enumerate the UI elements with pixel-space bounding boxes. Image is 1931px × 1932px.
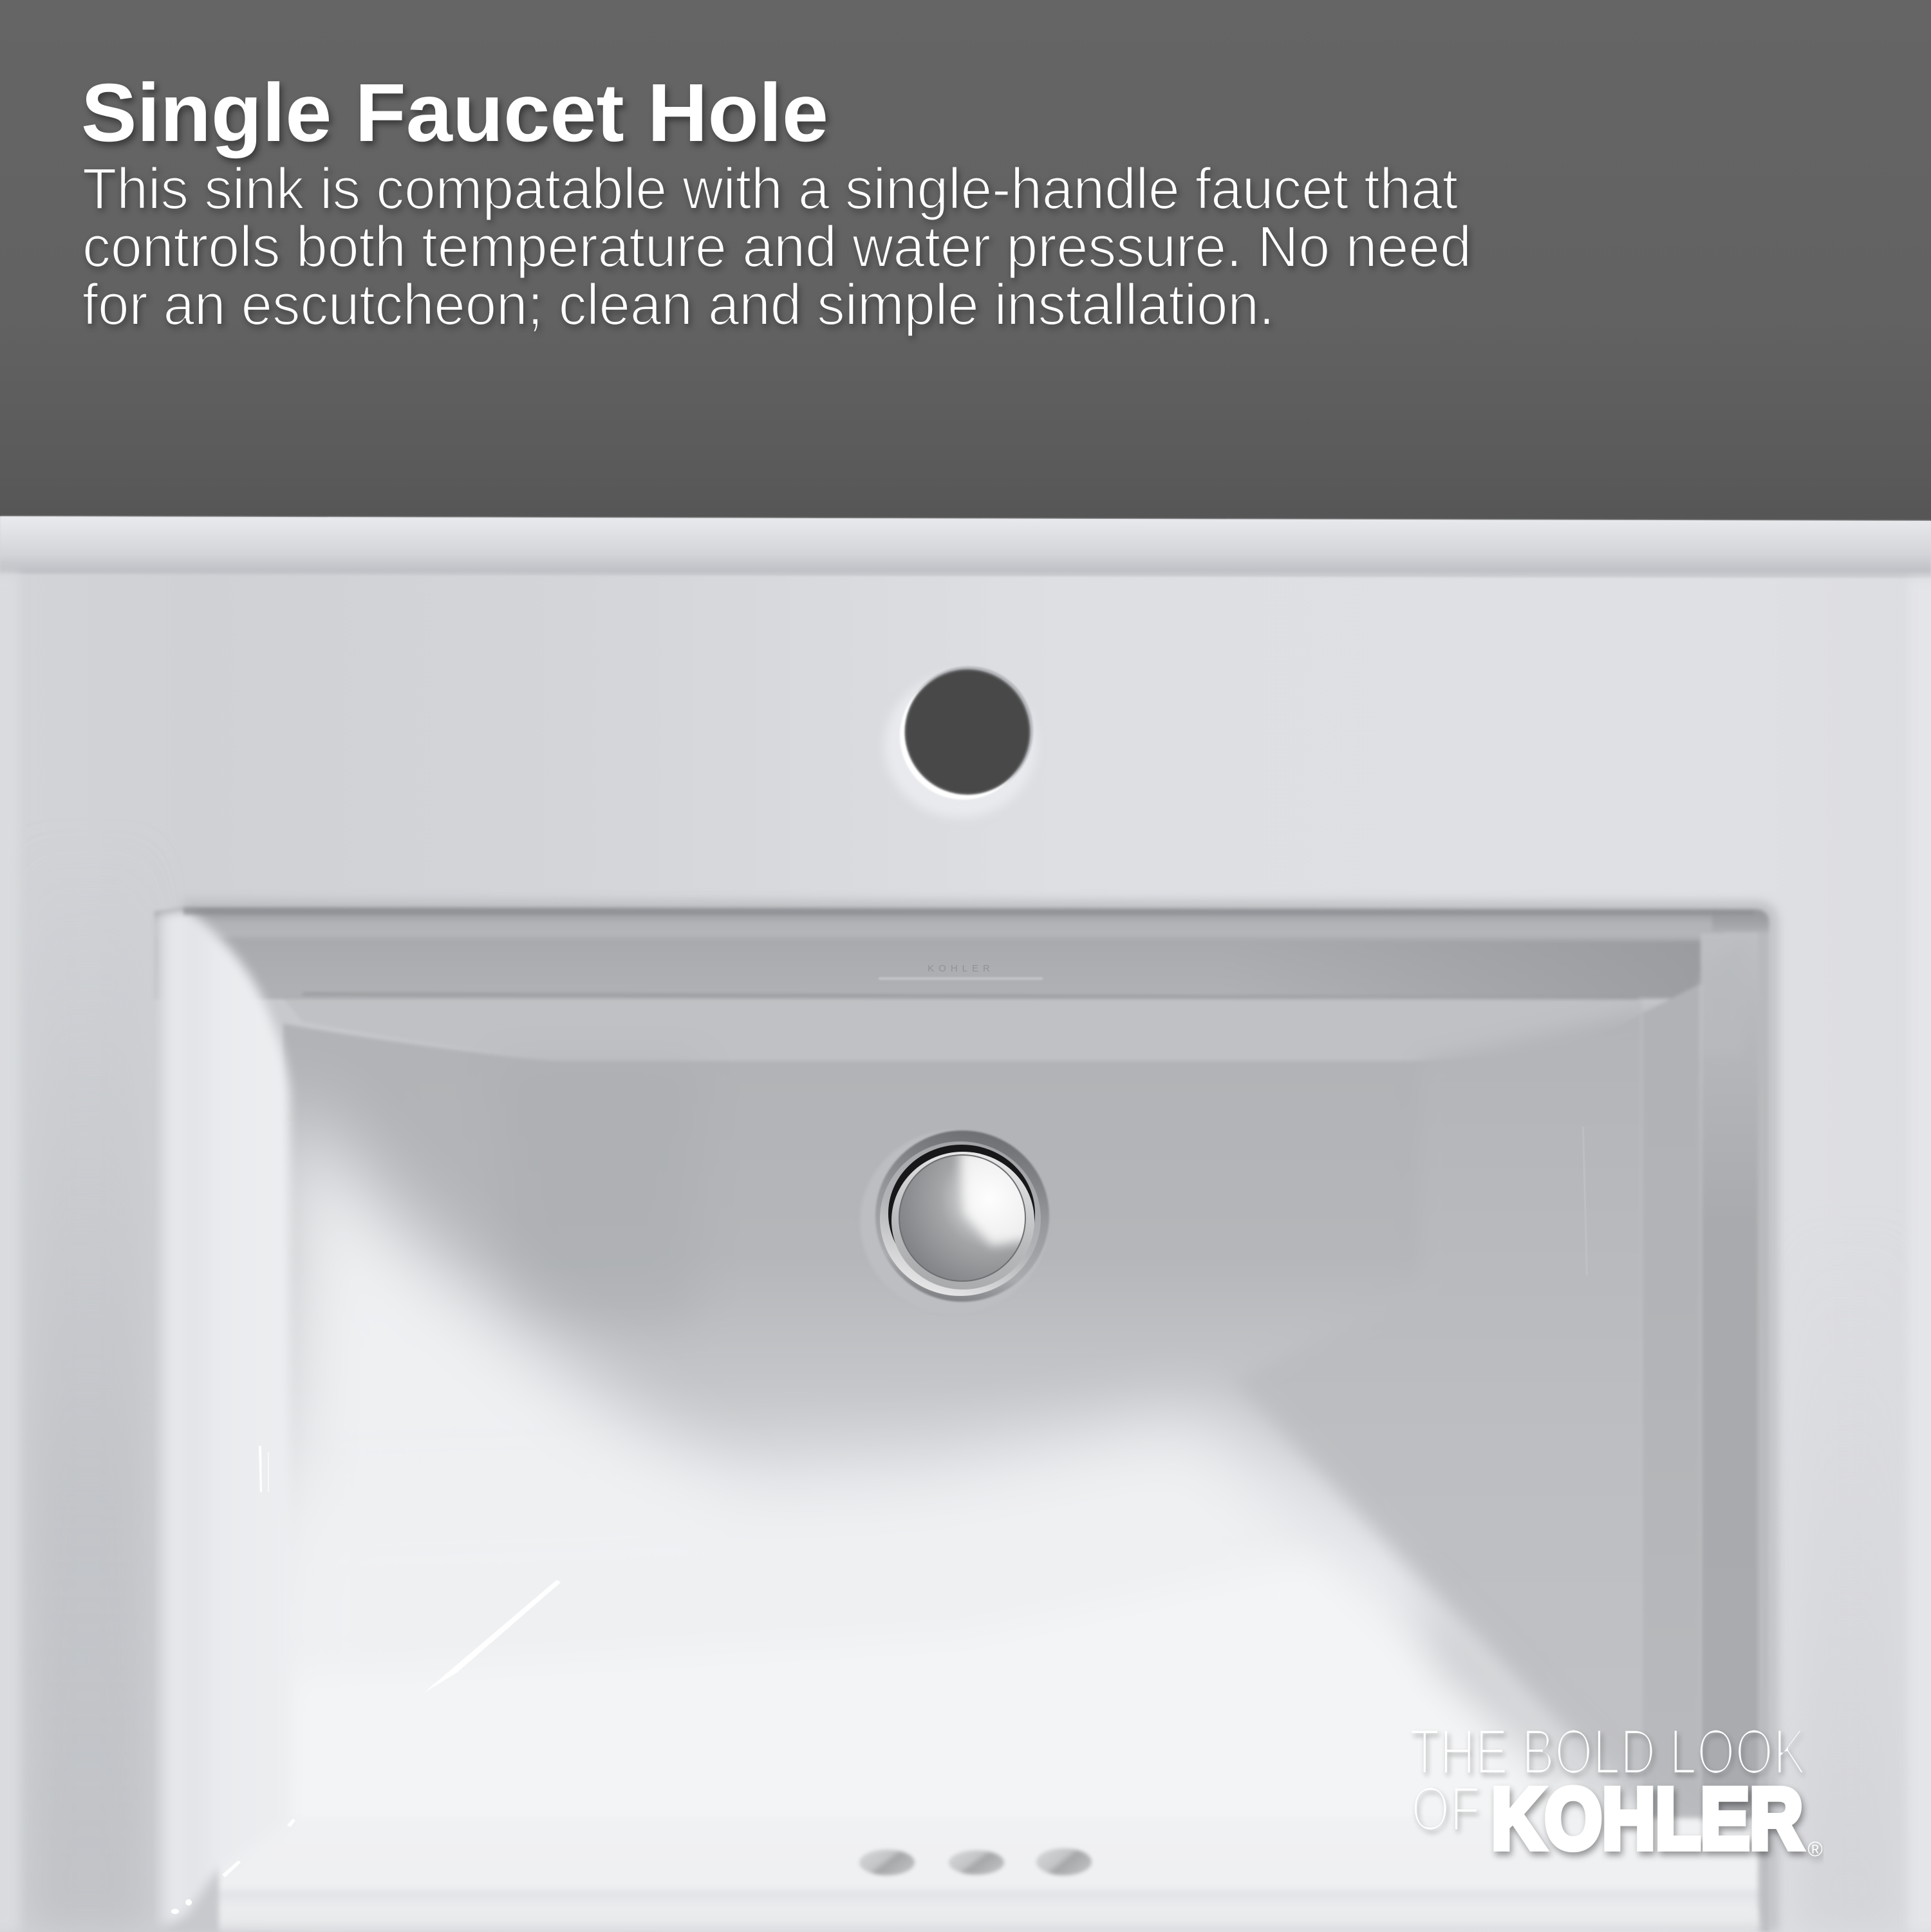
lighter shelf under back wall	[283, 999, 1642, 1061]
right moulding edge	[1908, 579, 1931, 1932]
top rim wrapping corner	[1712, 907, 1771, 933]
hole rim shade	[904, 666, 1033, 795]
drain halo	[860, 1130, 1048, 1313]
body text	[82, 157, 1471, 337]
logo wordmark: KOHLER	[1491, 1771, 1803, 1867]
inner back-wall line	[303, 993, 1638, 999]
bowl interior	[283, 1012, 1642, 1822]
bottom white rim	[219, 1818, 1758, 1932]
lower-right deck shading	[1796, 1223, 1905, 1932]
corner glint 1	[287, 1819, 295, 1827]
bowl base	[175, 998, 1668, 1930]
hole soft highlight	[884, 673, 1036, 818]
bowl	[154, 907, 1771, 1932]
logo word: of: OF	[1411, 1774, 1480, 1844]
cap reflection	[959, 1149, 1036, 1246]
light left wall reflection	[283, 1094, 740, 1822]
drain lower bright ring	[880, 1141, 1041, 1296]
right wall panel	[1642, 984, 1701, 1870]
floor shadow along diagonal	[1403, 1571, 1635, 1809]
top moulding band	[0, 516, 1931, 578]
back wall of bowl	[154, 907, 1725, 999]
corner glint 2	[222, 1861, 241, 1877]
corner glint 4	[171, 1909, 179, 1914]
corner glint 3	[185, 1899, 192, 1906]
logo: The Bold Look of Kohler	[1410, 1716, 1823, 1867]
darker panel beside the drain	[502, 1065, 695, 1323]
lower-left deck shading	[26, 837, 151, 1932]
sink deck surface	[0, 516, 1931, 1932]
floor white glow	[283, 1416, 1738, 1932]
panel: grey header background	[0, 0, 1931, 525]
right wall panel left edge	[1641, 1014, 1643, 1812]
drain cap ring	[899, 1154, 1026, 1282]
body line 2: controls both temperature and water pressure. No need	[82, 215, 1471, 279]
back wall darkening to right	[1425, 941, 1701, 998]
left moulding edge	[0, 573, 19, 1932]
overflow holes	[859, 1848, 1092, 1875]
left white rim wall	[154, 909, 290, 1932]
right wall glint	[1582, 1127, 1588, 1275]
moulded KOHLER mark: KOHLER	[928, 963, 994, 974]
logo line: the bold look: THE BOLD LOOK	[1410, 1716, 1806, 1787]
hole opening	[906, 670, 1029, 794]
overflow hole left	[859, 1850, 915, 1875]
drain outer ring	[875, 1130, 1049, 1302]
top edge shadow	[183, 907, 1754, 915]
body line 1: This sink is compatable with a single-handle faucet that	[82, 157, 1458, 221]
cap base	[900, 1156, 1025, 1280]
rim glint faint	[268, 1452, 269, 1492]
drain gap	[891, 1152, 1034, 1290]
bowl soft edge	[183, 905, 1773, 1932]
registered mark: ®	[1807, 1837, 1823, 1861]
drain dark ring	[888, 1145, 1035, 1282]
right wall dark band	[1701, 933, 1758, 1908]
title: Single Faucet Hole	[81, 67, 828, 159]
photo: sink	[0, 516, 1931, 1932]
side moulding edges	[0, 573, 1931, 1932]
overflow hole centre	[949, 1850, 1004, 1875]
right wall	[1232, 1011, 1701, 1870]
rim strip on right	[1758, 930, 1769, 1932]
bowl clip	[154, 907, 1771, 1932]
floor core	[283, 1558, 1609, 1932]
floor glint	[424, 1580, 561, 1693]
logo tagline	[1410, 1716, 1806, 1844]
right band highlight	[1700, 985, 1702, 1822]
drain	[860, 1130, 1049, 1313]
rim glints	[171, 1446, 295, 1914]
sharp floor corner	[1480, 1777, 1758, 1932]
right wall light strip near top	[1701, 940, 1743, 1056]
hole rim highlight	[900, 672, 1027, 800]
moulded mark underline	[879, 977, 1043, 980]
faucet hole	[884, 666, 1036, 818]
rim glint upper	[259, 1446, 262, 1492]
drain cap	[900, 1149, 1036, 1280]
body line 3: for an escutcheon; clean and simple installation.	[82, 273, 1274, 337]
overflow hole right	[1036, 1848, 1092, 1875]
